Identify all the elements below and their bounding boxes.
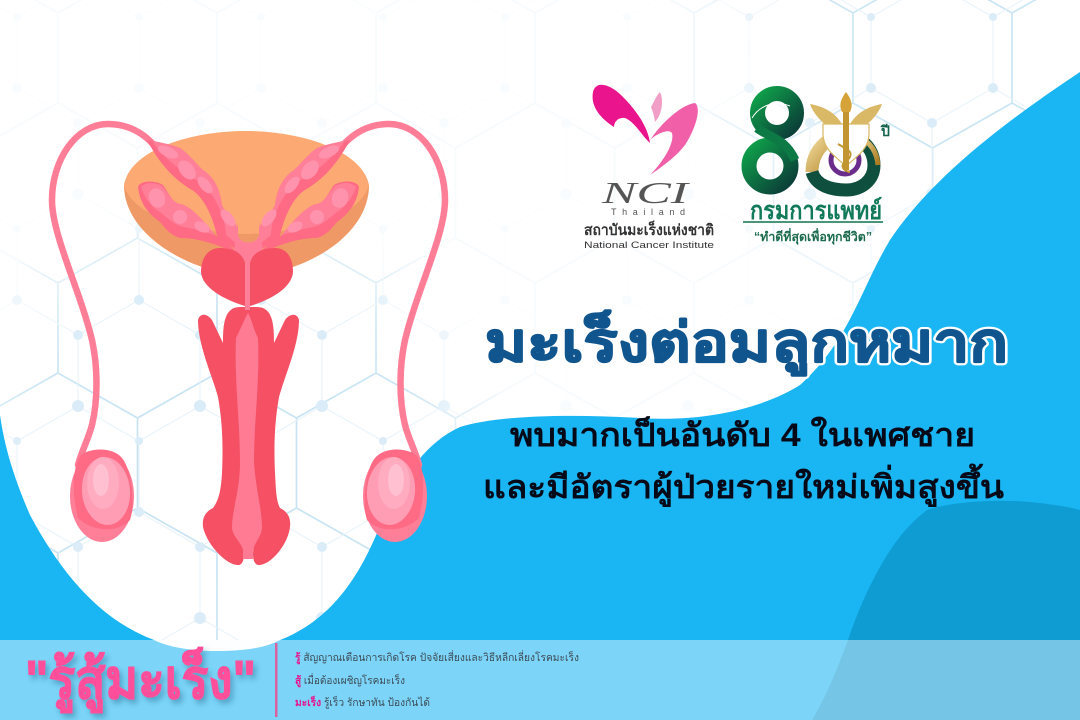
- title: มะเร็งต่อมลูกหมาก: [485, 311, 1008, 376]
- footer divider: [275, 643, 278, 717]
- footer band: [0, 640, 1080, 720]
- department name: กรมการแพทย์: [750, 196, 882, 225]
- left testis: [70, 450, 134, 542]
- subtitle: และมีอัตราผู้ป่วยรายใหม่เพิ่มสูงขึ้น: [483, 463, 1004, 508]
- title: มะเร็งต่อมลูกหมาก: [485, 311, 1008, 376]
- right testis: [363, 450, 427, 542]
- slogan: “ทำดีที่สุดเพื่อทุกชีวิต”: [754, 228, 872, 245]
- institute English name: National Cancer Institute: [584, 240, 714, 251]
- caduceus emblem: [810, 92, 882, 172]
- dark blue corner shape: [812, 501, 1080, 720]
- vas deferens left: [52, 124, 153, 465]
- penile crura and shaft: [198, 307, 299, 565]
- number zero: [812, 134, 878, 190]
- white blob tip over footer: [154, 640, 280, 651]
- bladder: [124, 131, 369, 268]
- footer slogan: "รู้สู้มะเร็ง": [25, 648, 256, 713]
- footer text lines: มะเร็ง รู้เร็ว รักษาทัน ป้องกันได้: [295, 695, 430, 709]
- left seminal vesicles: [138, 140, 238, 250]
- number eight: [749, 94, 796, 187]
- urethra: [232, 313, 262, 559]
- butterfly mark: [593, 85, 698, 175]
- logo: Department of Medical Services 80 years: [743, 92, 890, 245]
- anatomy illustration: [52, 124, 445, 565]
- institute Thai name: สถาบันมะเร็งแห่งชาติ: [584, 220, 714, 239]
- urethra junction: [226, 222, 271, 264]
- NCI script: NCI: [600, 175, 691, 210]
- footer text lines: [295, 650, 579, 709]
- subtitle: [483, 415, 1004, 508]
- years label: ปี: [880, 123, 890, 139]
- footer text lines: สู้ เมื่อต้องเผชิญโรคมะเร็ง: [295, 673, 405, 688]
- logo: National Cancer Institute: [584, 85, 714, 251]
- footer text lines: รู้ สัญญาณเตือนการเกิดโรค ปัจจัยเสี่ยงและวิธีหลีกเลี่ยงโรคมะเร็ง: [295, 650, 579, 665]
- subtitle: พบมากเป็นอันดับ 4 ในเพศชาย: [510, 415, 975, 453]
- vas deferens right: [344, 124, 445, 465]
- right seminal vesicles: [259, 140, 359, 250]
- prostate: [201, 248, 293, 310]
- Thailand: Thailand: [611, 207, 685, 217]
